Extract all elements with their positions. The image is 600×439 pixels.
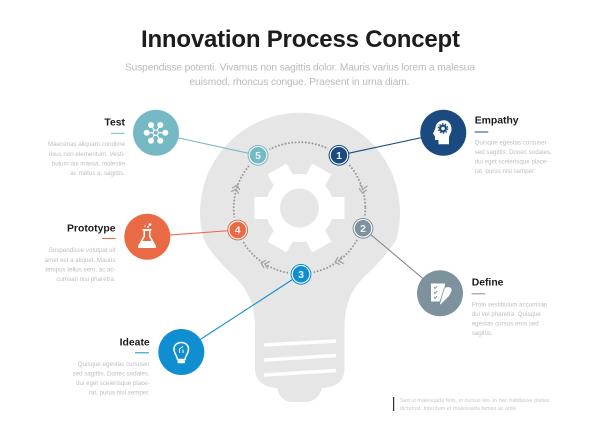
step marker 1: [329, 145, 349, 166]
step marker 4: [227, 220, 248, 240]
label: ideate: Quisque egestas cursuser: [78, 361, 150, 368]
icon: light bulb (ideate): [158, 329, 204, 375]
label: define: egestas cursus eros sed: [472, 321, 539, 328]
step marker 3: 3: [298, 269, 304, 281]
icon: flask (prototype): [124, 214, 170, 260]
connector: prototype: [147, 230, 238, 237]
icon: head with gear (empathy): [420, 110, 466, 156]
step marker 5: 5: [255, 150, 261, 162]
label: ideate: rat, purus nisl semper.: [89, 390, 150, 396]
label: prototype: tempus tellus sem, ac ac-: [45, 266, 116, 273]
step marker 5: [248, 145, 268, 166]
subtitle: [125, 63, 475, 88]
step marker 2: 2: [360, 223, 366, 235]
connector: empathy: [339, 133, 443, 155]
step marker 4: 4: [235, 225, 241, 237]
label: test: ac metus a, sagittis.: [70, 170, 125, 177]
label: define: sagittis.: [472, 330, 493, 337]
label: ideate: sed sagittis. Donec sodales,: [73, 370, 150, 378]
label: test: [48, 118, 126, 177]
footnote: Sed ut malesuada felis, in cursus leo. In hac habitasse platea: [400, 398, 550, 404]
label: prototype: amet est a aliquet. Mauris: [45, 257, 116, 264]
footnote: [393, 397, 550, 412]
light bulb silhouette: [200, 113, 400, 402]
subtitle: Suspendisse potenti. Vivamus non sagittis dolor. Mauris varius lorem a malesua: [125, 63, 475, 74]
label: prototype: Suspendisse volutpat sit: [49, 247, 116, 254]
icon: checklist and pen (define): [417, 270, 463, 316]
label: ideate: Ideate: [120, 338, 150, 348]
subtitle: euismod, rhoncus congue. Praesent in urna diam.: [190, 77, 410, 88]
label: define: [472, 278, 548, 337]
step marker 1: 1: [336, 150, 342, 162]
label: test: risus non elementum. Vesti-: [49, 151, 125, 158]
label: test: Test: [104, 118, 126, 128]
marker halos: [225, 142, 376, 287]
label: test: Maecenas aliquam condime: [48, 141, 126, 148]
label: prototype: cumsan nisi pharetra.: [56, 276, 116, 283]
label: define: dui vel pharetra. Quisque: [472, 311, 541, 318]
label: prototype: [45, 224, 116, 283]
label: empathy: Quisque egestas cursuser: [475, 140, 547, 146]
footnote: dictumst. Interdum et malesuada fames ac ante.: [400, 406, 518, 412]
label: empathy: dui eget scelerisque place-: [475, 159, 548, 166]
label: empathy: rat, purus nisl semper.: [475, 168, 536, 175]
label: empathy: Empathy: [475, 116, 519, 126]
gear: [254, 164, 344, 252]
step marker 3: [291, 264, 311, 285]
dotted process ring: [234, 142, 365, 274]
label: empathy: [475, 116, 552, 175]
label: prototype: Prototype: [67, 224, 116, 234]
connector: test: [156, 133, 258, 155]
title: Innovation Process Concept: [141, 26, 460, 53]
icon: network (test): [133, 110, 179, 156]
label: ideate: [73, 338, 150, 396]
label: empathy: sed sagittis. Donec sodales,: [475, 149, 552, 156]
label: ideate: dui eget scelerisque place-: [76, 380, 150, 387]
direction chevrons: [231, 184, 368, 269]
connector: ideate: [181, 274, 301, 352]
label: test: bulum dui massa, molestie: [52, 160, 126, 167]
label: define: Define: [472, 278, 504, 288]
step marker 2: [353, 218, 373, 239]
connector: define: [363, 228, 440, 293]
label: define: Proin vestibulum accumsan: [472, 301, 548, 308]
